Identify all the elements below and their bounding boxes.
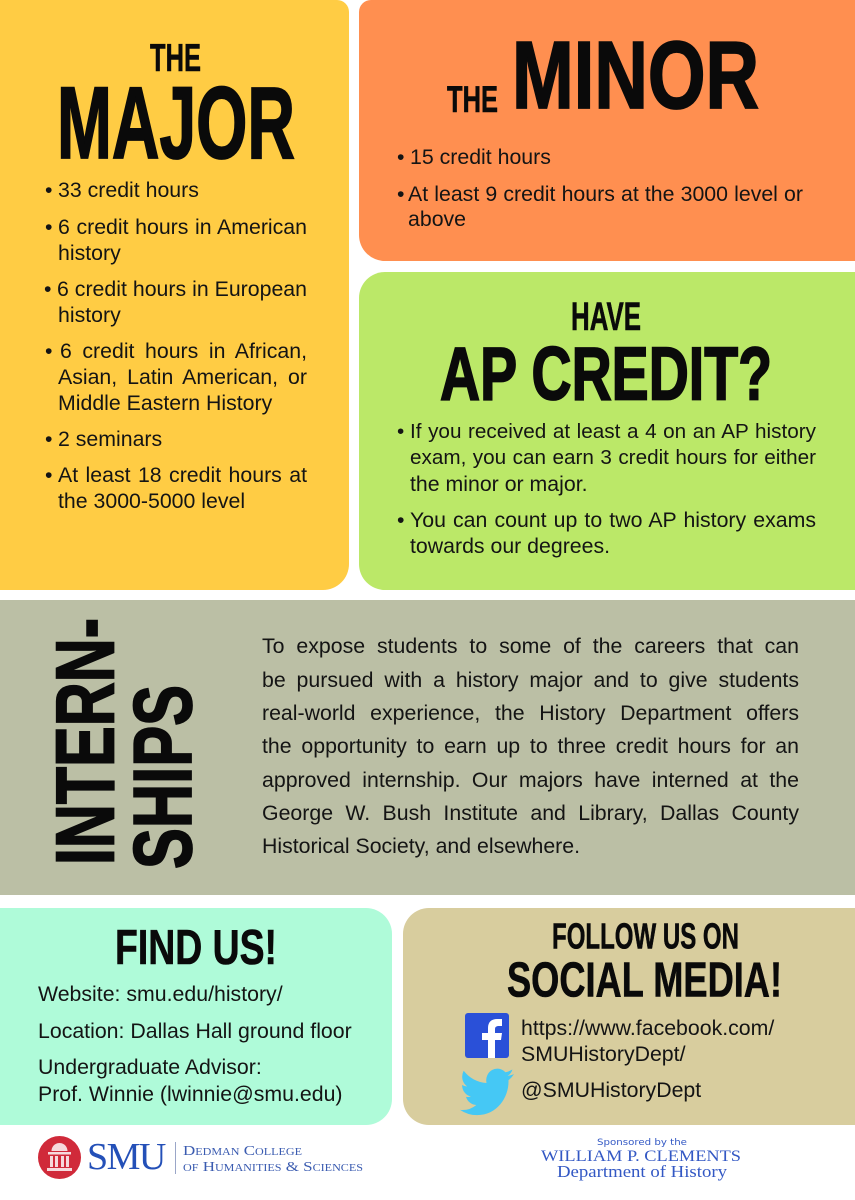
text: contact details: Prof. Winnie (lwinnie@smu.edu) <box>38 1082 342 1106</box>
panel: internships <box>0 600 855 895</box>
text: William P. Clements: WILLIAM P. CLEMENTS <box>541 1148 741 1165</box>
text: department of history: Department of History <box>557 1162 728 1181</box>
list: AP credit rules <box>397 420 816 558</box>
list: AP credit rules: the minor or major. <box>410 472 588 496</box>
text: internships description: approved internship. Our majors have interned at the <box>262 768 799 792</box>
text: SMU wordmark: SMU <box>87 1136 165 1178</box>
logo: sponsored by Clements Department of History <box>541 1138 741 1181</box>
text: contact details: Undergraduate Advisor: <box>38 1054 262 1078</box>
text: facebook link <box>521 1016 774 1066</box>
list: major requirements: history <box>58 240 121 264</box>
heading: have AP credit <box>440 295 772 416</box>
list: major requirements: 2 seminars <box>58 426 162 450</box>
heading: the minor: MINOR <box>512 22 759 129</box>
icon: twitter bird <box>460 1068 514 1116</box>
text: contact details <box>38 982 352 1106</box>
panel: the minor <box>359 0 855 261</box>
text: internships description: George W. Bush Institute and Library, Dallas County <box>262 800 799 824</box>
heading: follow us on social media: FOLLOW US ON <box>552 916 739 956</box>
panel: social media <box>403 908 855 1125</box>
text: college name <box>175 1142 363 1175</box>
list: AP credit rules: • <box>397 508 404 532</box>
text: internships description: the opportunity to earn up to three credit hours for an <box>262 734 799 758</box>
text: internships description: Historical Society, and elsewhere. <box>262 834 580 858</box>
list: AP credit rules: If you received at least a 4 on an AP history <box>410 420 816 442</box>
panel: the major <box>0 0 349 590</box>
text: contact details: Website: smu.edu/history/ <box>38 982 283 1006</box>
list: major requirements: • <box>44 276 51 300</box>
list: major requirements <box>44 178 307 512</box>
heading: the major: MAJOR <box>57 66 295 180</box>
list: major requirements: 6 credit hours in African, <box>60 338 307 362</box>
list: AP credit rules: • <box>397 420 404 442</box>
list: major requirements: 6 credit hours in American <box>58 214 307 238</box>
text: facebook link: https://www.facebook.com/ <box>521 1016 774 1040</box>
list: major requirements: • <box>45 214 52 238</box>
text: twitter handle: @SMUHistoryDept <box>521 1078 701 1102</box>
list: major requirements: • <box>45 338 52 362</box>
list: major requirements: • <box>45 462 52 486</box>
heading: internships rotated: SHIPS <box>116 685 209 869</box>
text: internships description: real-world experience, the History Department offers <box>262 700 799 724</box>
icon: facebook <box>465 1013 509 1058</box>
list: major requirements: 33 credit hours <box>58 178 199 202</box>
text: college name: of Humanities & Sciences <box>183 1160 363 1175</box>
list: major requirements: Middle Eastern History <box>58 390 272 414</box>
list: AP credit rules: You can count up to two AP history exams <box>410 508 816 532</box>
list: minor requirements: 15 credit hours <box>410 144 551 168</box>
logo: SMU Dedman College <box>38 1136 363 1179</box>
list: minor requirements: • <box>397 144 404 168</box>
panel: AP credit <box>359 272 855 590</box>
icon: SMU seal <box>38 1136 81 1179</box>
list: AP credit rules: exam, you can earn 3 credit hours for either <box>410 446 816 468</box>
list: minor requirements: • <box>397 182 404 206</box>
text: contact details: Location: Dallas Hall ground floor <box>38 1018 352 1042</box>
list: major requirements: Asian, Latin American, or <box>58 364 307 388</box>
text: internships description <box>262 634 799 858</box>
list: minor requirements: above <box>408 206 466 230</box>
text: sponsored by: Sponsored by the <box>597 1138 687 1148</box>
heading: the minor <box>447 22 759 129</box>
heading: the major: THE <box>150 37 201 80</box>
list: major requirements: the 3000-5000 level <box>58 488 245 512</box>
heading: internships rotated <box>38 618 209 869</box>
list: major requirements: 6 credit hours in European <box>57 276 307 300</box>
list: AP credit rules: towards our degrees. <box>410 534 610 558</box>
heading: internships rotated: INTERN- <box>38 618 132 865</box>
heading: have AP credit: HAVE <box>571 295 641 339</box>
heading: follow us on social media <box>507 916 782 1008</box>
text: college name: Dedman College <box>183 1144 302 1159</box>
heading: the major <box>57 37 295 180</box>
text: facebook link: SMUHistoryDept/ <box>521 1042 686 1066</box>
list: major requirements: • <box>45 426 52 450</box>
heading: find us: FIND US! <box>115 921 277 975</box>
list: major requirements: • <box>45 178 52 202</box>
text: internships description: be pursued with a history major and to give students <box>262 668 799 692</box>
list: minor requirements <box>397 144 803 230</box>
list: minor requirements: At least 9 credit hours at the 3000 level or <box>408 182 803 206</box>
list: major requirements: At least 18 credit hours at <box>58 462 307 486</box>
panel: find us <box>0 908 392 1125</box>
heading: the minor: THE <box>447 79 498 120</box>
text: internships description: To expose students to some of the careers that can <box>262 634 799 658</box>
list: major requirements: history <box>58 302 121 326</box>
